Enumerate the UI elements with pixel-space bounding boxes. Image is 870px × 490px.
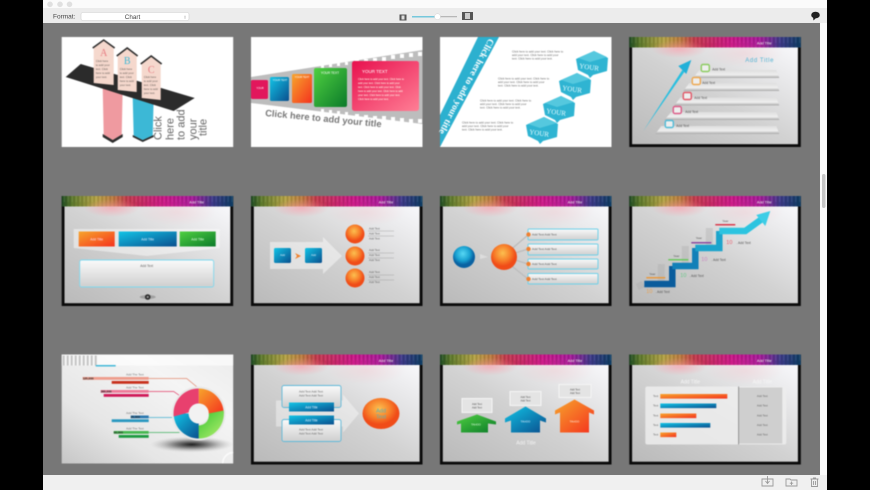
slide 3: cubes: [436, 37, 612, 147]
frame pink: here to add your text. Click here to add: [358, 89, 403, 93]
top box: Add Text Add Text: [299, 394, 323, 398]
slide 6: arrow to balls: Add Title: [379, 200, 393, 204]
blue ball: [453, 246, 475, 268]
right labels: [757, 394, 768, 436]
footer bar: [43, 475, 827, 490]
toolbar: [43, 8, 827, 23]
body text rows: [462, 50, 564, 132]
slide 12: bar chart: [629, 354, 801, 464]
frame pink: your text. Click here to add your text.: [358, 93, 401, 97]
bar labels: 60,000: [114, 430, 123, 434]
panel: [645, 386, 786, 444]
corner arc: [223, 452, 233, 464]
divider: [737, 386, 740, 444]
headings: [681, 380, 772, 386]
frame pink: [352, 61, 419, 111]
orange ball: Add: [376, 408, 386, 414]
top box: Add Text Add Text: [299, 390, 323, 394]
tag B: to add your: [120, 71, 134, 75]
tag C: to add your: [144, 79, 158, 83]
tag B: [117, 48, 138, 92]
year labels: [649, 219, 728, 276]
translucent arrow: [276, 394, 359, 432]
cube 3: [543, 96, 575, 123]
right labels: Add Text: [757, 394, 768, 398]
text lines: Add Text: [369, 275, 380, 279]
slide 7: tree diagram: Add Title: [568, 200, 582, 204]
bottom box: Add Text Add Text: [299, 432, 323, 436]
button blue: [119, 232, 177, 246]
tag C: Click here: [144, 75, 157, 79]
cube 1: YOUR: [579, 62, 600, 73]
tag A: here to add: [96, 71, 110, 75]
bar labels: Text: [653, 404, 659, 408]
right labels: Add Text: [757, 423, 768, 427]
button orange: [79, 232, 115, 246]
green text box: Add Text: [472, 402, 482, 406]
slide 2: film strip: [251, 37, 422, 147]
blue text box: [510, 392, 541, 406]
value labels: 10: [701, 257, 707, 263]
blue bar 2: [289, 416, 334, 424]
year labels: Year: [673, 254, 679, 258]
orange ball: [491, 244, 517, 270]
slide 8: rising stairs: . Add Text: [736, 241, 751, 245]
cube 2: [559, 73, 591, 100]
frame blue: [270, 77, 289, 101]
blue bar 2: Add Title: [305, 418, 318, 422]
slide 8: rising stairs: [629, 196, 801, 306]
blue text box: Add Text: [520, 395, 531, 399]
frame pink: Click here to add your text. Click here to: [358, 77, 405, 81]
orange ball: [362, 398, 400, 429]
slide 1: arrow tags: [62, 37, 233, 147]
slide 8: rising stairs: . Add Text: [655, 290, 670, 294]
bar labels: Text: [653, 432, 659, 436]
labels: Add Text: [712, 68, 725, 72]
labels: Add Text: [685, 110, 698, 114]
film strip: [251, 50, 422, 124]
bar labels: 125,000: [83, 376, 94, 380]
vertical title: Click: [153, 116, 165, 140]
body text rows: text. Click here to add your text.: [480, 106, 521, 110]
body text rows: text. Click here to add your text.: [512, 56, 553, 60]
slide 8: rising stairs: . Add Text: [711, 258, 726, 262]
tag B: B: [124, 56, 131, 67]
year labels: Year: [696, 236, 702, 240]
slide 10: two boxes to ball: Add Title: [379, 359, 393, 363]
scrollbar track: [820, 23, 827, 475]
frame magenta: YOUR: [256, 86, 264, 90]
text lines: Add Text: [369, 236, 380, 240]
slide 5: three buttons: Add Title: [189, 200, 204, 204]
green arrow: TAHOO: [471, 422, 482, 426]
tag A: A: [100, 48, 108, 59]
black platform: [66, 64, 195, 111]
slide 7: tree diagram: [440, 196, 612, 306]
text lines: Add Text: [369, 258, 380, 262]
tag B: here to add: [120, 79, 134, 83]
frame green: YOUR TEXT: [321, 71, 339, 75]
bar labels: 25,000: [131, 415, 140, 419]
bar labels: 360,000: [101, 390, 112, 394]
body text rows: add your text. Click here to add your: [512, 53, 558, 57]
square 2: Add: [311, 253, 316, 257]
green text box: Add Text: [472, 406, 482, 410]
tag A: to add your: [96, 63, 110, 67]
body text rows: Click here to add your text. Click here to: [480, 98, 532, 102]
stair shadow: [637, 228, 709, 287]
cube 3: YOUR: [546, 107, 567, 118]
option boxes: Add Text Add Text: [532, 247, 557, 251]
balls: [346, 224, 364, 288]
text lines: Add Text: [369, 226, 380, 230]
format label: Format:: [53, 14, 76, 20]
orange arrow: [555, 400, 594, 432]
button blue: Add Title: [141, 238, 154, 242]
value labels: 10: [680, 273, 686, 279]
body text rows: add your text. Click here to add your: [462, 124, 508, 128]
slide 11: three house arrows: Add Title: [568, 359, 582, 363]
slide 4: stepped pyramid: Add Title: [757, 42, 772, 46]
bar labels: [83, 372, 149, 438]
labels: Add Text: [702, 81, 715, 85]
frame green: [314, 68, 347, 107]
headings: Add Title: [753, 380, 772, 386]
square 2: [305, 248, 322, 263]
icon: folder add: [786, 479, 797, 486]
option boxes: Add Text Add Text: [532, 277, 557, 281]
body text rows: text. Click here to add your text.: [498, 84, 539, 88]
slide 5: three buttons: [62, 196, 233, 306]
badges: [665, 64, 709, 128]
vertical title: here: [165, 118, 177, 140]
orange text box: [559, 384, 591, 398]
bar labels: Text: [653, 423, 659, 427]
format dropdown: ↕: [184, 14, 186, 20]
body text rows: Click here to add your text. Click here to: [498, 76, 550, 80]
orange text box: Add Text: [570, 391, 580, 395]
frame pink: text. Click here to add your text. Click: [358, 85, 402, 89]
button green: Add Title: [191, 238, 204, 242]
year labels: Year: [649, 272, 655, 276]
option boxes: Add Text Add Text: [532, 232, 557, 236]
text lines: Add Text: [369, 232, 380, 236]
rainbow mark: [96, 365, 116, 366]
body text rows: add your text. Click here to add your: [480, 102, 526, 106]
tag A: Click here: [96, 59, 109, 63]
text lines: Add Text: [369, 280, 380, 284]
scrollbar thumb: [822, 174, 826, 208]
tag A: your text.: [96, 75, 107, 79]
right labels: Add Text: [757, 414, 768, 418]
vertical title: your: [188, 118, 200, 140]
labels: [676, 68, 725, 128]
tag C: text. Click: [144, 83, 156, 87]
year labels: Year: [722, 219, 728, 223]
vertical title: [153, 109, 210, 140]
frame blue: YOUR TEXT: [273, 78, 288, 82]
bars: [660, 394, 727, 437]
orange text box: Add Text: [570, 388, 580, 392]
format dropdown: Chart: [125, 14, 140, 21]
text box: [80, 260, 214, 287]
format dropdown: [81, 12, 189, 21]
slide 8: rising stairs: Add Title: [757, 200, 772, 204]
blue arrow: [505, 406, 546, 432]
shadow: [150, 436, 234, 452]
frame orange: [292, 74, 312, 103]
slide 6: arrow to balls: [251, 196, 422, 306]
top band: [62, 354, 233, 366]
icon: trash: [810, 478, 818, 486]
text lines: Add Text: [369, 270, 380, 274]
option boxes: Add Text Add Text: [532, 262, 557, 266]
text lines: [369, 226, 380, 284]
slide 8: rising stairs: . Add Text: [689, 274, 704, 278]
text lines: Add Text: [369, 248, 380, 252]
tag B: text. Click: [120, 75, 132, 79]
lower ribbons: [103, 87, 154, 143]
bar labels: Text: [653, 414, 659, 418]
connectors: [508, 235, 528, 279]
bar labels: [653, 394, 659, 436]
slide 9: donut chart: [62, 354, 234, 464]
cube 2: YOUR: [562, 84, 583, 95]
right labels: Add Text: [757, 404, 768, 408]
frame pink: add your text. Click here to add your: [358, 81, 400, 85]
label: Add Title: [516, 440, 536, 446]
bottom box: Add Text Add Text: [299, 428, 323, 432]
cube 4: [526, 117, 558, 144]
slide 12: bar chart: Add Title: [757, 359, 772, 363]
green text box: [462, 398, 492, 412]
text lines: Add Text: [369, 253, 380, 257]
size slider: [400, 12, 473, 20]
year underlines: [646, 224, 735, 278]
body text rows: Click here to add your text. Click here to: [462, 120, 514, 124]
orange arrow: TAHOO: [570, 420, 580, 424]
stair arrow: [644, 211, 770, 284]
blue bar 1: Add Title: [305, 405, 318, 409]
footer icons: [762, 476, 818, 486]
window controls: [47, 2, 72, 7]
slide 10: two boxes to ball: [251, 354, 422, 464]
button orange: Add Title: [90, 238, 103, 242]
text box: Add Text: [140, 264, 153, 268]
frame orange: YOUR TEXT: [295, 75, 310, 79]
bar labels: Add The Text: [126, 411, 144, 415]
square 1: Add: [280, 253, 285, 257]
icon: import: [762, 476, 773, 486]
bar labels: Text: [653, 394, 659, 398]
tag A: [93, 40, 115, 85]
body text rows: add your text. Click here to add your: [498, 80, 544, 84]
headings: Add Title: [681, 380, 700, 386]
title: Click here to add your title: [265, 108, 382, 129]
labels: Add Text: [694, 96, 707, 100]
tag A: text. Click: [96, 67, 108, 71]
heading: Add Title: [745, 58, 774, 64]
body text rows: text. Click here to add your text.: [462, 128, 503, 132]
orange ball: Text: [376, 414, 387, 420]
small arrow: [480, 254, 488, 259]
bottom box: [282, 420, 341, 442]
blue bar 1: [289, 402, 334, 412]
value labels: 10: [646, 289, 652, 295]
cube 4: YOUR: [529, 128, 550, 139]
right column: [738, 388, 782, 444]
title bar: [43, 0, 827, 8]
slide 11: three house arrows: [440, 354, 612, 464]
film holes: [321, 52, 422, 123]
labels: Add Text: [676, 124, 689, 128]
green arrow: [457, 414, 496, 432]
steps: [655, 70, 779, 134]
top stripes: [63, 356, 97, 366]
top box: [282, 386, 341, 408]
value labels: 10: [726, 240, 732, 246]
vertical title: title: [198, 119, 210, 136]
frame pink: YOUR TEXT: [362, 69, 388, 74]
blue arrow: TAHOO: [521, 420, 531, 424]
slide 4: stepped pyramid: [629, 37, 801, 147]
icon: chat bubble: [811, 12, 820, 20]
funnel panel: [74, 229, 220, 256]
right labels: Add Text: [757, 432, 768, 436]
value labels: [646, 240, 732, 295]
arrow: [643, 60, 691, 131]
diagonal title: Click here to add your title: [436, 37, 495, 136]
connectors: [149, 378, 204, 432]
body text rows: Click here to add your text. Click here to: [512, 50, 564, 54]
small arrow: [295, 253, 301, 259]
tag C: [141, 56, 162, 100]
bar labels: Add The Text: [126, 386, 144, 390]
tag B: your text.: [120, 83, 131, 87]
frame pink: Click here to add your text.: [358, 97, 389, 101]
diagonal band: [440, 37, 499, 147]
frame magenta: [251, 80, 268, 99]
cube 1: [576, 51, 608, 78]
vertical title: to add: [176, 109, 188, 140]
button green: [180, 232, 216, 246]
donut: [172, 386, 226, 440]
icon: eye: [140, 294, 156, 300]
tag C: C: [148, 65, 155, 76]
blue text box: Add Text: [520, 398, 531, 402]
tag C: here to add: [144, 87, 158, 91]
option boxes: [526, 229, 598, 284]
large arrow: [270, 237, 342, 274]
square 1: [274, 248, 291, 263]
tag B: Click here: [120, 67, 133, 71]
bar labels: Add The Text: [126, 426, 144, 430]
bar labels: Add The Text: [126, 372, 144, 376]
tag C: your text.: [144, 91, 155, 95]
